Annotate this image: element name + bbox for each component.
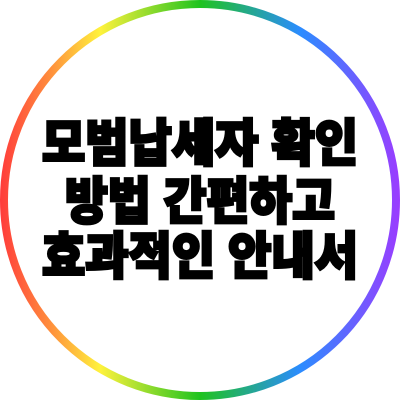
title line 3: 효과적인 안내서 (42, 229, 358, 285)
title line 2: 방법 간편하고 (65, 174, 335, 230)
title (42, 116, 358, 285)
title line 1: 모범납세자 확인 (42, 116, 358, 172)
